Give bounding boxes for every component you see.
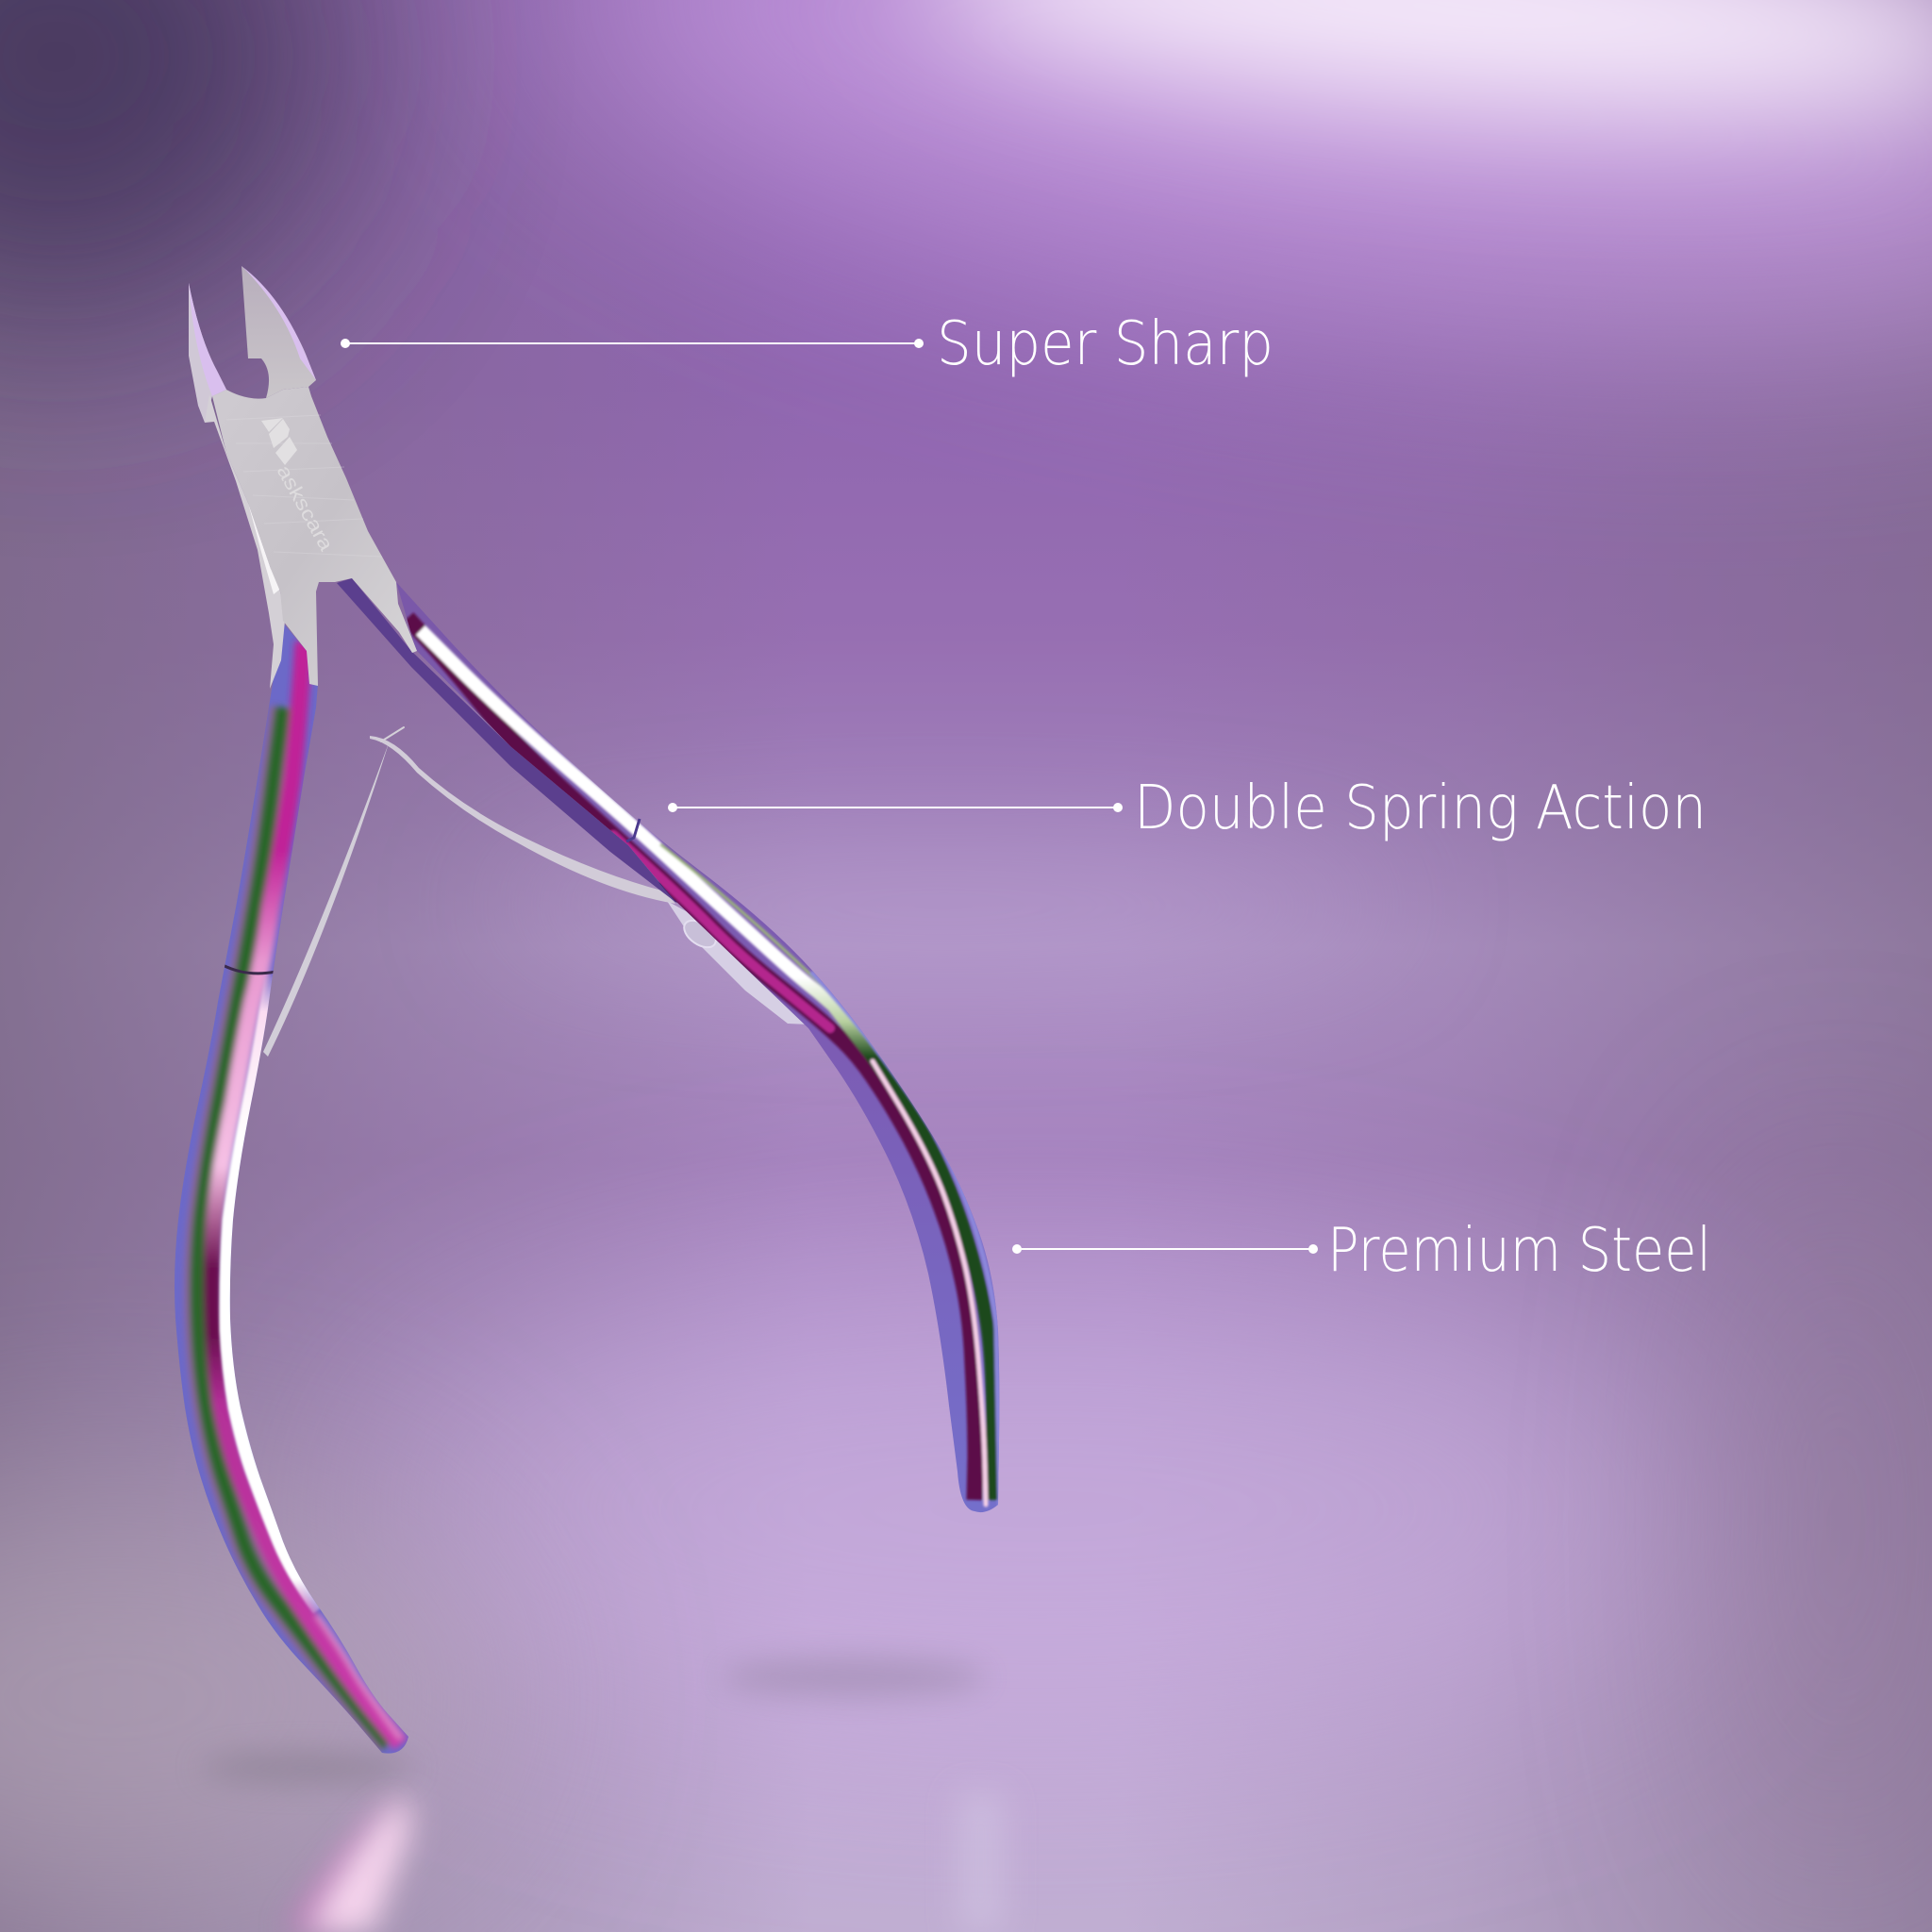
right handle [396, 583, 1000, 1513]
callout: Premium Steel: Premium Steel [1327, 1216, 1711, 1286]
logo mark [261, 418, 297, 465]
right handle shadow [337, 578, 676, 903]
callout: Double Spring Action [668, 774, 1707, 843]
spring plate and rivet [658, 882, 811, 1024]
head side bevel [205, 394, 285, 689]
callout: Super Sharp: Super Sharp [937, 309, 1274, 379]
callout: Premium Steel [1012, 1216, 1711, 1286]
floor shadows and reflections [201, 1658, 1005, 1932]
spring wires [263, 727, 675, 1057]
head main face [212, 387, 417, 686]
left jaw [189, 283, 226, 423]
callout: Super Sharp [341, 309, 1274, 379]
logo text: askscara [273, 461, 337, 555]
right handle collar [626, 819, 640, 841]
left handle [175, 625, 408, 1754]
nipper tool [160, 266, 1038, 1764]
callout: Double Spring Action: Double Spring Action [1134, 774, 1707, 843]
steel head with jaws [189, 266, 417, 689]
right jaw [242, 266, 316, 398]
